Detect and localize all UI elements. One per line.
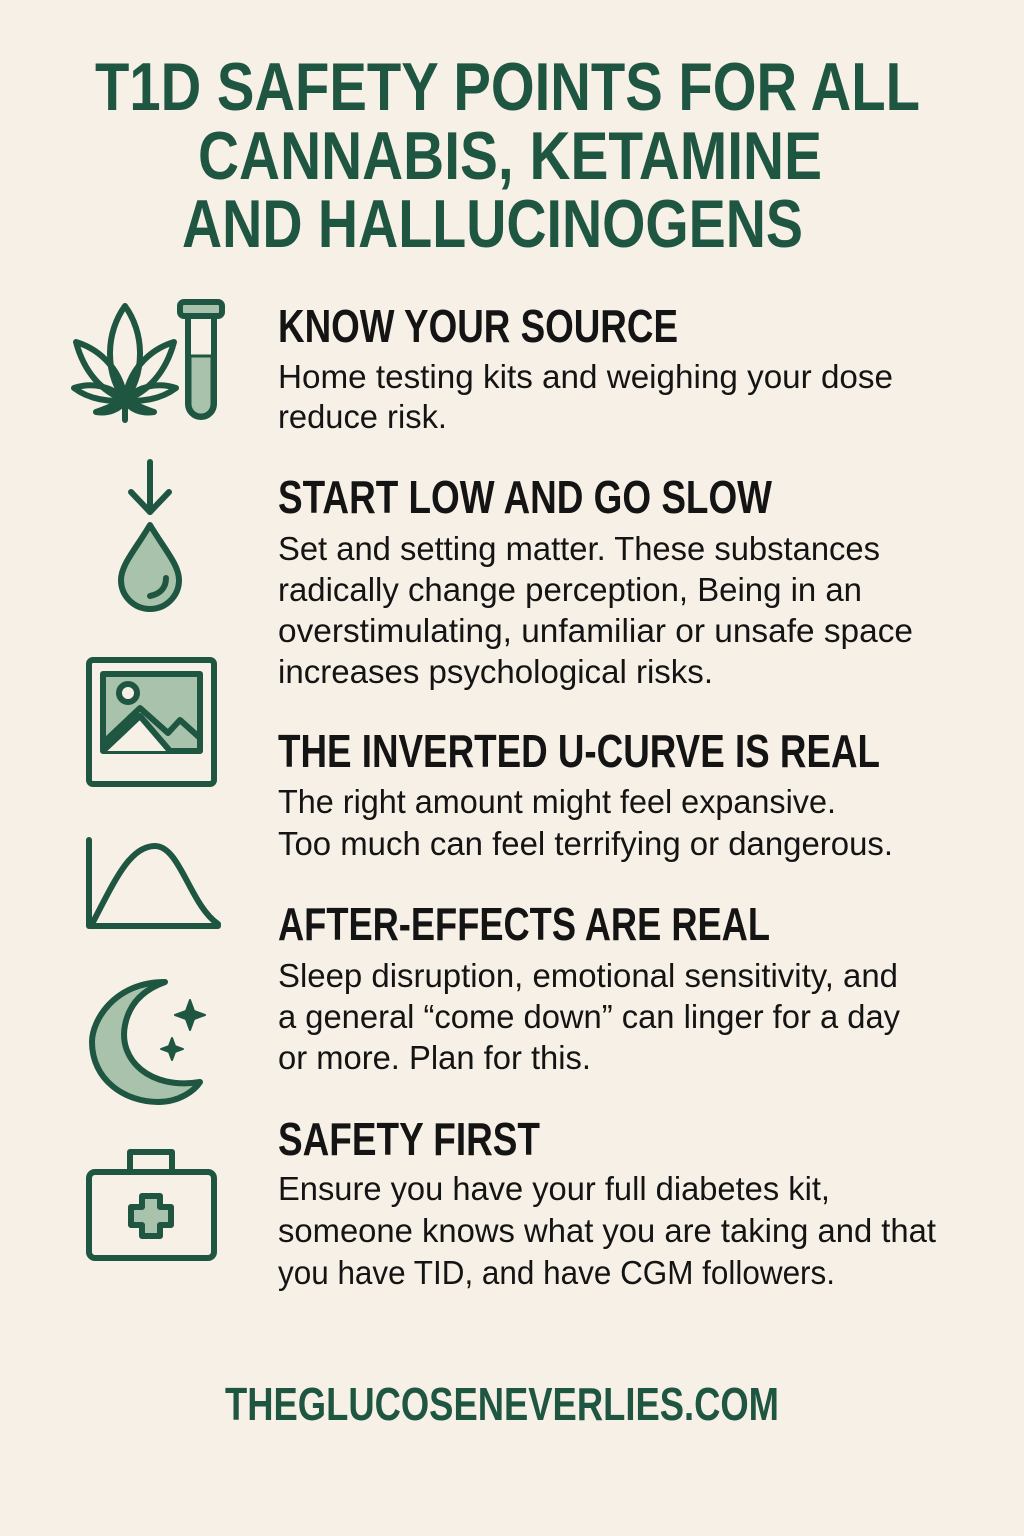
section: start low and go slow: Set and setting matter. These substances (278, 530, 880, 567)
icon: first aid kit (89, 1152, 214, 1258)
section: start low and go slow: START LOW AND GO SLOW (278, 471, 772, 523)
section: safety first: Ensure you have your full diabetes kit, (278, 1170, 830, 1207)
icon: picture frame (89, 660, 214, 784)
section: safety first: SAFETY FIRST (278, 1113, 540, 1165)
section: safety first (278, 1113, 936, 1291)
section: safety first: you have TID, and have CGM followers. (278, 1254, 835, 1291)
icon: moon and stars (92, 982, 205, 1102)
title: AND HALLUCINOGENS (182, 186, 803, 262)
icon: cannabis leaf and test tube (74, 302, 222, 420)
section: after-effects: or more. Plan for this. (278, 1039, 591, 1076)
section: know your source: Home testing kits and weighing your dose (278, 358, 893, 395)
section: start low and go slow: overstimulating, unfamiliar or unsafe space (278, 612, 913, 649)
section: inverted u-curve: THE INVERTED U-CURVE IS REAL (278, 725, 880, 777)
section: after-effects: Sleep disruption, emotional sensitivity, and (278, 957, 898, 994)
section: know your source (278, 300, 893, 435)
section: start low and go slow (278, 471, 913, 690)
title (95, 49, 920, 262)
section: know your source: KNOW YOUR SOURCE (278, 300, 678, 352)
icon: inverted u curve (89, 840, 218, 926)
section: know your source: reduce risk. (278, 398, 447, 435)
section: safety first: someone knows what you are taking and that (278, 1212, 936, 1249)
section: start low and go slow: radically change perception, Being in an (278, 571, 862, 608)
section: after-effects: AFTER-EFFECTS ARE REAL (278, 898, 770, 950)
title: CANNABIS, KETAMINE (198, 118, 822, 194)
section: after-effects: a general “come down” can linger for a day (278, 998, 900, 1035)
icon: arrow and drop (121, 462, 179, 609)
footer: website: THEGLUCOSENEVERLIES.COM (225, 1378, 779, 1430)
section: after-effects (278, 898, 900, 1076)
section: inverted u-curve: The right amount might feel expansive. (278, 783, 836, 820)
section: start low and go slow: increases psychological risks. (278, 653, 713, 690)
section: inverted u-curve: Too much can feel terrifying or dangerous. (278, 825, 893, 862)
section: inverted u-curve (278, 725, 893, 862)
